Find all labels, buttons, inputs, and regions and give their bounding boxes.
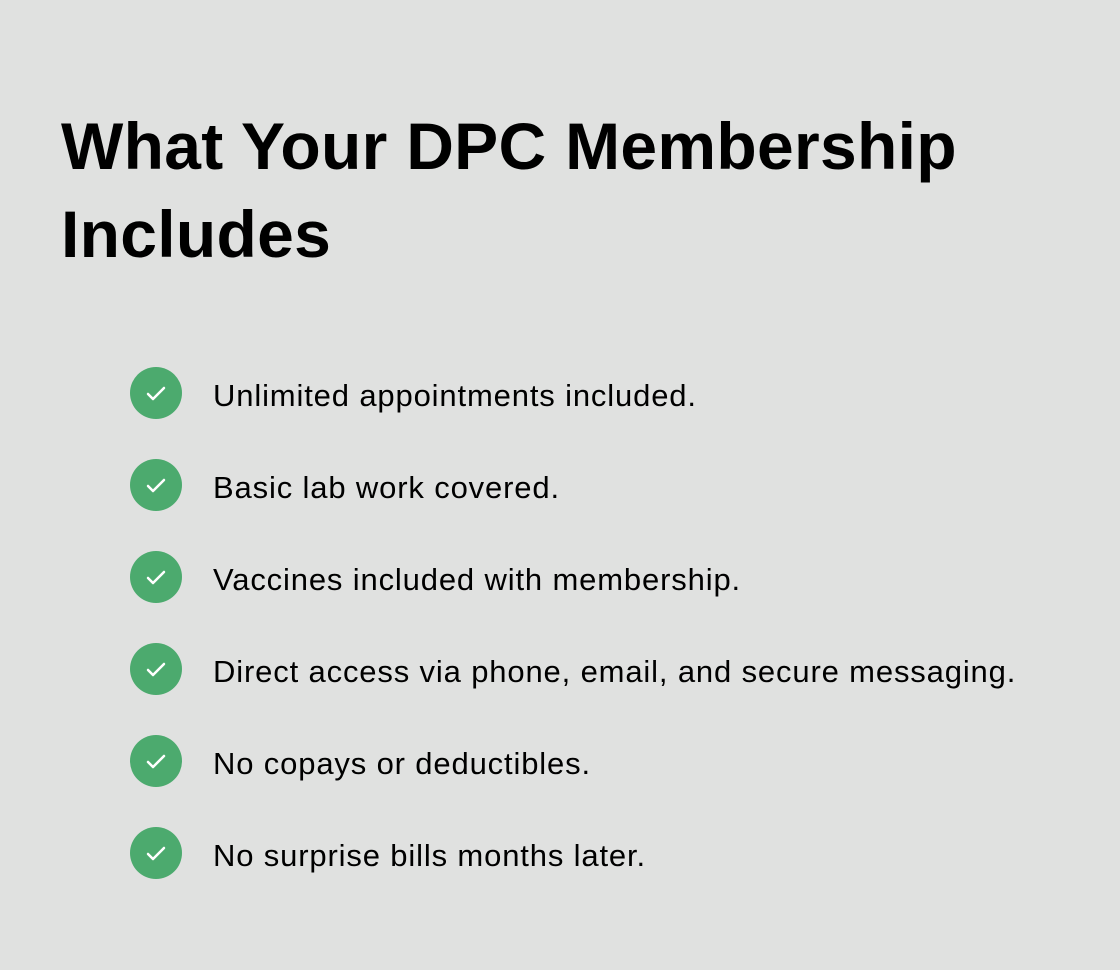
item: no copays xyxy=(130,735,591,787)
text: Direct access via phone, email, and secure messaging. xyxy=(213,654,1016,689)
text: Basic lab work covered. xyxy=(213,470,560,505)
item: no surprise bills xyxy=(130,827,646,879)
text: No surprise bills months later. xyxy=(213,838,646,873)
icon: check xyxy=(130,827,182,879)
title: Includes xyxy=(61,197,331,271)
item: unlimited appointments xyxy=(130,367,697,419)
icon: check xyxy=(130,735,182,787)
text: No copays or deductibles. xyxy=(213,746,591,781)
item: lab work xyxy=(130,459,560,511)
text: Unlimited appointments included. xyxy=(213,378,697,413)
item: direct access xyxy=(130,643,1016,695)
checklist xyxy=(130,367,1016,879)
title: What Your DPC Membership xyxy=(61,109,957,183)
icon: check xyxy=(130,367,182,419)
text: Vaccines included with membership. xyxy=(213,562,741,597)
icon: check xyxy=(130,459,182,511)
icon: check xyxy=(130,551,182,603)
item: vaccines xyxy=(130,551,741,603)
icon: check xyxy=(130,643,182,695)
title xyxy=(61,109,957,271)
